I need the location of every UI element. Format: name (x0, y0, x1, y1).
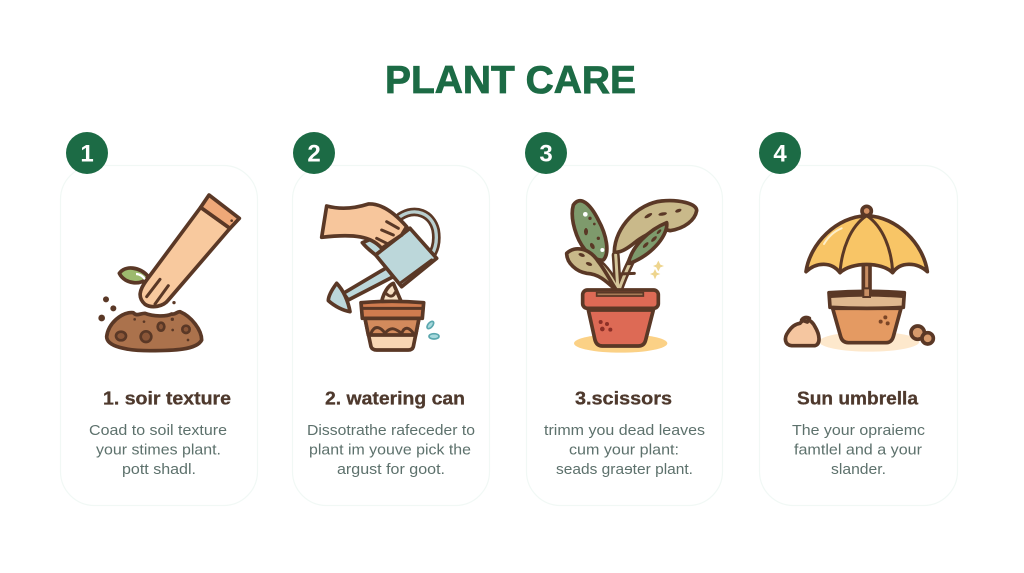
step 3 description: cum your plant: (569, 442, 679, 458)
panel: step 3 scissors (525, 132, 722, 506)
card background (526, 166, 722, 506)
step 2 description: argust for goot. (337, 462, 445, 478)
step 2 description: plant im youve pick the (309, 442, 471, 458)
card background (760, 166, 958, 506)
card background (292, 166, 490, 506)
icon: watering can over pot (322, 204, 439, 350)
step 3 description: trimm you dead leaves (544, 423, 705, 439)
card background (60, 166, 258, 506)
number badge 1: 1 (80, 140, 94, 168)
panel: step 4 sun umbrella (759, 132, 958, 506)
title: PLANT CARE (385, 59, 636, 102)
panel: step 2 watering can (292, 132, 490, 506)
step 4 heading: Sun umbrella (797, 388, 919, 408)
number badge 2 (293, 132, 335, 174)
step 1 description: your stimes plant. (96, 442, 221, 458)
icon: hand pressing soil (98, 195, 239, 351)
step 4 description: slander. (831, 462, 886, 478)
step 4 description: famtlel and a your (794, 442, 922, 458)
step 3 description (544, 423, 705, 478)
number badge 3: 3 (539, 140, 553, 168)
icon: potted plant with damaged leaves (567, 201, 697, 353)
step 3 description: seads graɘter plant. (556, 462, 693, 478)
number badge 4: 4 (773, 140, 787, 168)
icon: umbrella over pot (785, 206, 933, 352)
step 1 heading: 1. soir texture (103, 388, 231, 408)
step 2 description (307, 423, 475, 478)
step 2 description: Dissotrathe rafeceder to (307, 423, 475, 439)
number badge 2: 2 (307, 140, 321, 168)
step 2 heading: 2. watering can (325, 388, 465, 408)
step 4 description: The your opraiemc (792, 423, 925, 439)
number badge 1 (66, 132, 108, 174)
step 3 heading: 3.scissors (575, 388, 672, 408)
step 1 description: Coad to soil texture (89, 423, 227, 439)
step 1 description (89, 423, 227, 478)
step 1 description: pott shadl. (122, 462, 196, 478)
number badge 4 (759, 132, 801, 174)
number badge 3 (525, 132, 567, 174)
panel: step 1 soil texture (60, 132, 258, 506)
step 4 description (792, 423, 925, 478)
